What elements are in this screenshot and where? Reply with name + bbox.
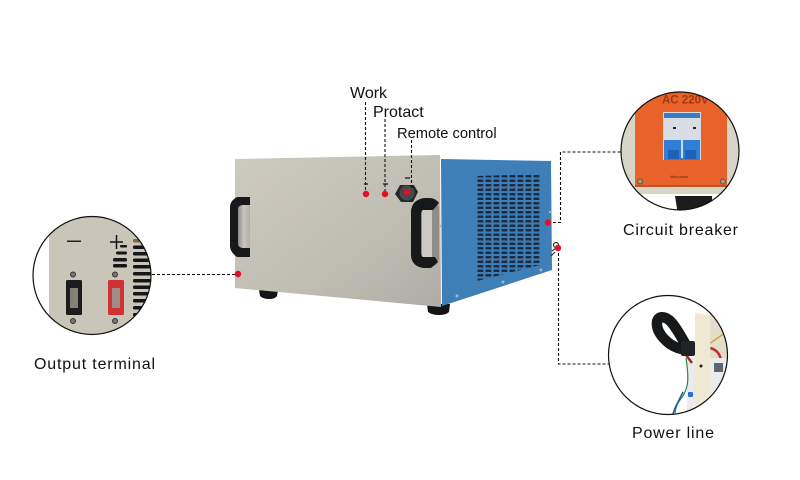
device: power supply cabinet	[230, 155, 558, 315]
label: Circuit breaker: Circuit breaker	[623, 222, 739, 239]
ventilation grille	[477, 174, 541, 282]
label: Remote control: Remote control	[397, 126, 497, 142]
label: Protact: Protact	[373, 104, 424, 121]
right handle	[411, 198, 439, 268]
left handle	[230, 197, 250, 257]
black wedge	[675, 196, 712, 210]
cream panel	[695, 313, 711, 407]
plate screws	[638, 179, 726, 184]
callout dots	[235, 189, 561, 277]
minus sign	[67, 240, 81, 242]
negative terminal	[66, 280, 82, 315]
label: Work: Work	[350, 85, 388, 102]
main power marking: Main power	[670, 175, 689, 179]
black corrugated hose	[657, 317, 692, 350]
vent slots	[113, 239, 153, 316]
inset: circuit breaker	[620, 91, 740, 211]
power connector	[551, 242, 558, 256]
remote control connector	[395, 185, 418, 202]
infographic	[32, 86, 740, 438]
lower white area	[640, 194, 720, 210]
blue connector	[688, 392, 693, 397]
inset: power line	[608, 296, 735, 420]
rear interior	[710, 314, 727, 358]
wires	[675, 358, 688, 413]
side screws	[440, 211, 551, 298]
callout lines	[152, 102, 621, 364]
label: Power line: Power line	[632, 425, 714, 442]
breaker body	[663, 112, 701, 160]
AC 220V marking: AC 220V	[662, 94, 709, 106]
inset: output terminal	[32, 216, 152, 336]
foot: left	[259, 290, 278, 299]
blue side panel	[441, 159, 552, 306]
QR code	[714, 363, 723, 372]
foot: right	[427, 304, 450, 315]
positive terminal	[108, 280, 124, 315]
label: Output terminal: Output terminal	[34, 356, 155, 373]
orange plate	[635, 85, 727, 187]
inset panel	[49, 217, 150, 334]
indicator marks	[364, 177, 410, 185]
terminal screws	[70, 272, 118, 324]
white box with QR	[687, 358, 727, 410]
plus sign	[110, 235, 123, 249]
front panel	[235, 155, 441, 307]
